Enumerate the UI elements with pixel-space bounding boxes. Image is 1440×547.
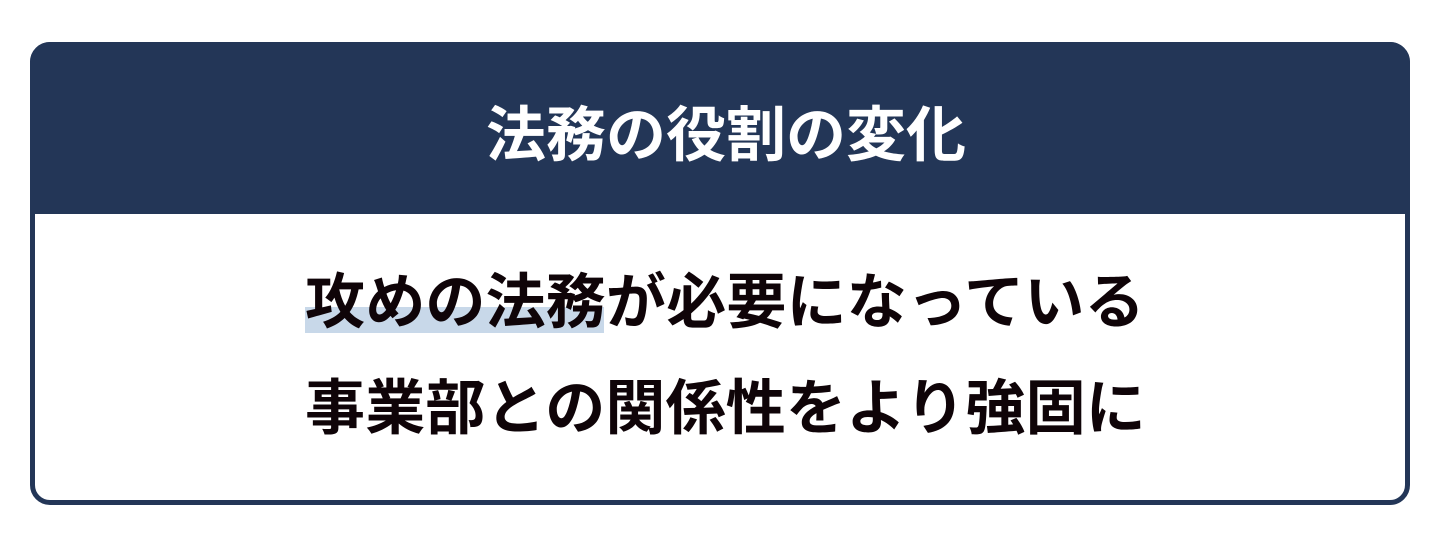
heading: 法務の役割の変化 [486,102,966,169]
highlight: attacking legal [305,307,604,333]
text: line one: 攻めの法務が必要になっている [305,269,1145,336]
heading [30,42,1410,214]
text: line two: 事業部との関係性をより強固に [305,375,1146,442]
